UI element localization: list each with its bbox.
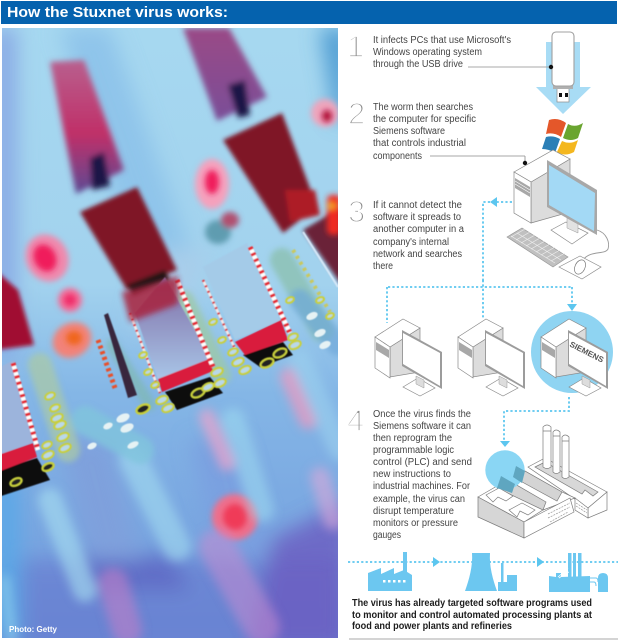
- step 1 text: Windows operating system: [373, 47, 482, 58]
- photo: circuit board close-up: [0, 28, 350, 640]
- step 3 text: company's internal: [373, 237, 449, 248]
- number 1: 1: [347, 29, 364, 64]
- step 1 text: It infects PCs that use Microsoft's: [373, 35, 511, 46]
- back building: [528, 458, 607, 518]
- icon: highlighted computer with Siemens: SIEMENS: [568, 340, 606, 365]
- step 4: [347, 403, 472, 541]
- step 4 text: programmable logic: [373, 445, 454, 456]
- step 3 text: software it spreads to: [373, 212, 461, 223]
- sharp chips: [0, 232, 338, 497]
- icon: computer 2: [458, 319, 525, 396]
- step 2 text: the computer for specific: [373, 114, 476, 125]
- step 2: [348, 96, 476, 162]
- step 4 text: Once the virus finds the: [373, 409, 471, 420]
- step 3 text: another computer in a: [373, 224, 464, 235]
- main block: [478, 466, 575, 538]
- icon: factory: [368, 552, 412, 591]
- blurred bead fields: [40, 260, 338, 450]
- number 3: 3: [348, 194, 365, 229]
- icon: Windows logo: [542, 119, 583, 154]
- network dotted paths: [348, 202, 618, 562]
- step 4 text: new instructions to: [373, 469, 451, 480]
- summary text: to monitor and control automated processing plants at: [352, 610, 593, 621]
- red glows: [18, 99, 339, 540]
- icon: factory with infected section: [478, 425, 607, 538]
- title banner: [1, 1, 617, 24]
- icon: main computer: [430, 150, 609, 279]
- icon: highlighted computer with Siemens: [531, 311, 613, 396]
- icon: computer 1: [375, 319, 442, 396]
- step 2 text: components: [373, 151, 422, 162]
- step 4 text: example, the virus can: [373, 494, 465, 505]
- chip rows top: [50, 28, 267, 194]
- step 2 text: Siemens software: [373, 126, 445, 137]
- number 2: 2: [348, 96, 365, 131]
- step 3 text: [373, 200, 464, 272]
- step 4 text: control (PLC) and send: [373, 457, 472, 468]
- step 2 text: The worm then searches: [373, 102, 473, 113]
- step 1 text: through the USB drive: [373, 59, 463, 70]
- solder pads: [9, 296, 335, 488]
- step 3 text: there: [373, 261, 393, 272]
- mouse and pad: [559, 256, 601, 279]
- photo credit: Photo: Getty: [9, 624, 57, 634]
- step 1: [347, 29, 511, 70]
- icon: cooling tower: [465, 553, 517, 591]
- step 4 text: gauges: [373, 530, 401, 541]
- summary text: food and power plants and refineries: [352, 621, 512, 632]
- step 4 text: [373, 409, 472, 541]
- icons: industrial plants: [368, 552, 608, 592]
- step 4 text: then reprogram the: [373, 433, 452, 444]
- step 3 text: network and searches: [373, 249, 462, 260]
- chip C blurred top: [122, 276, 178, 322]
- highlight circle: [485, 450, 525, 493]
- step 3 text: If it cannot detect the: [373, 200, 462, 211]
- dotted path arrowheads: [433, 197, 577, 567]
- summary text: [352, 598, 593, 632]
- step 2 text: [373, 102, 476, 162]
- step 4 text: industrial machines. For: [373, 481, 471, 492]
- step 3: [348, 194, 464, 272]
- step 2 text: that controls industrial: [373, 138, 466, 149]
- chimneys: [543, 425, 569, 478]
- number 4: 4: [347, 403, 364, 438]
- lower blurred strips: [5, 360, 340, 640]
- keyboard: [507, 228, 568, 267]
- icon: arrow with USB drive: [468, 32, 591, 114]
- icon: refinery: [549, 553, 608, 592]
- step 4 text: monitors or pressure: [373, 518, 458, 529]
- step 1 text: [373, 35, 511, 70]
- heading: How the Stuxnet virus works:: [7, 5, 228, 21]
- summary text: The virus has already targeted software programs used: [352, 598, 592, 609]
- step 4 text: Siemens software it can: [373, 421, 471, 432]
- step 4 text: disrupt temperature: [373, 506, 454, 517]
